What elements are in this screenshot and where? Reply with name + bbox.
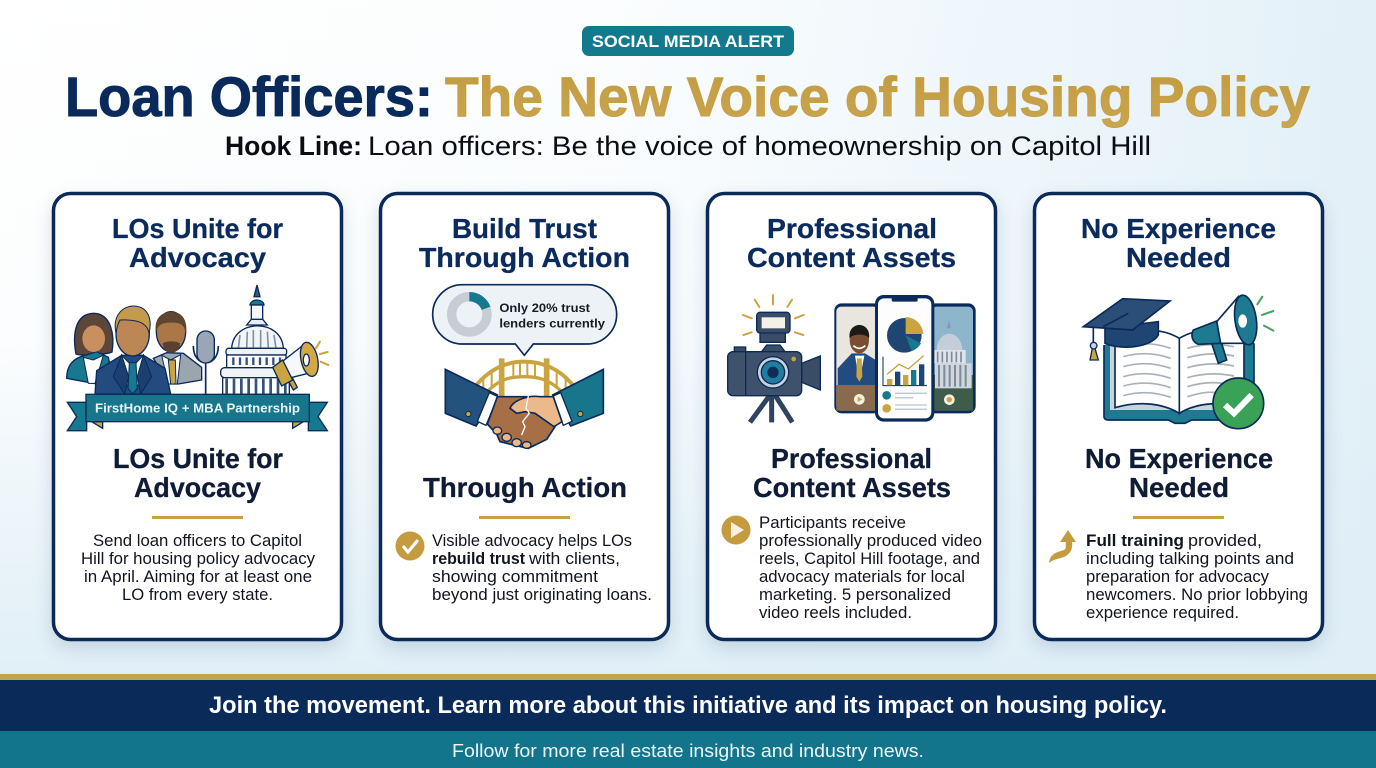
- card 3 body text: reels, Capitol Hill footage, and: [759, 549, 980, 568]
- icon: gold check: [396, 532, 424, 560]
- lens: [757, 357, 789, 388]
- megaphone: [1212, 340, 1227, 363]
- card 4 body text: provided,: [1188, 531, 1262, 550]
- bar and line chart: [883, 357, 927, 386]
- panel: professional content assets: [708, 194, 996, 640]
- hook line: Loan officers: Be the voice of homeownership on Capitol Hill: [368, 131, 1151, 161]
- card 1 subheading: [113, 443, 283, 503]
- card 2 body text: showing commitment: [432, 567, 598, 586]
- panel: no experience needed: [1034, 194, 1322, 640]
- ribbon: [67, 394, 327, 431]
- woman: [75, 313, 113, 355]
- card 4 body text: newcomers. No prior lobbying: [1086, 585, 1308, 604]
- card 2 body text: beyond just originating loans.: [432, 585, 652, 604]
- card 1 heading: Advocacy: [129, 242, 266, 273]
- right phone: [928, 303, 976, 413]
- bubble text: lenders currently: [499, 316, 605, 330]
- icon: loan officers, capitol and partnership ribbon: [67, 285, 328, 431]
- sleeves: [445, 369, 497, 426]
- card 4 subheading: Needed: [1129, 472, 1229, 503]
- camera rays: [743, 295, 804, 335]
- card 1 body text: LO from every state.: [122, 585, 273, 604]
- footer: gold stripe and call to action: [0, 674, 1376, 731]
- card 4 body text: preparation for advocacy: [1086, 567, 1269, 586]
- card 4 body text: [1086, 531, 1308, 622]
- speech bubble: [433, 285, 617, 355]
- icon: gold play: [722, 516, 750, 544]
- card 1 body text: Send loan officers to Capitol: [93, 531, 302, 550]
- megaphone: [273, 341, 328, 390]
- card 2 body text: Visible advocacy helps LOs: [432, 531, 632, 550]
- left phone: [834, 303, 881, 413]
- card 1 body text: [81, 531, 315, 604]
- card 3 subheading: Content Assets: [753, 472, 951, 503]
- badge: social media alert: [582, 26, 794, 56]
- card 1 body text: Hill for housing policy advocacy: [81, 549, 315, 568]
- card 3 subheading: Professional: [771, 443, 932, 474]
- title: The New Voice of Housing Policy: [445, 65, 1310, 128]
- donut 20 percent: [452, 297, 487, 332]
- title: Loan Officers:: [65, 65, 433, 128]
- hook line: Hook Line:: [225, 131, 362, 161]
- icon: gold up arrow: [1049, 530, 1076, 563]
- card 1 heading: LOs Unite for: [112, 213, 283, 244]
- bubble text: [499, 301, 605, 330]
- list rows: [882, 391, 891, 400]
- center phone: [875, 295, 934, 422]
- card 2 body text: rebuild trust: [432, 549, 525, 568]
- card 4 body text: Full training: [1086, 531, 1184, 550]
- bubble text: Only 20% trust: [499, 301, 590, 315]
- tripod: [750, 395, 792, 422]
- card 4 body text: including talking points and: [1086, 549, 1294, 568]
- card 2 gold rule: [479, 516, 570, 519]
- panel: LOs unite for advocacy: [54, 194, 342, 640]
- card 4 body text: experience required.: [1086, 603, 1239, 622]
- icon: trust speech bubble and handshake: [433, 285, 617, 448]
- card 3 body text: marketing. 5 personalized: [759, 585, 951, 604]
- badge: social media alert: SOCIAL MEDIA ALERT: [592, 32, 785, 51]
- flash: [760, 332, 785, 342]
- card 1 heading: [112, 213, 283, 273]
- panel: build trust through action: [380, 194, 668, 640]
- right man: [153, 353, 202, 384]
- footer: follow line: Follow for more real estate insights and industry news.: [452, 741, 924, 761]
- card 2 heading: [419, 213, 630, 273]
- footer: follow line: [0, 731, 1376, 768]
- green check: [1213, 378, 1264, 429]
- pie chart: [887, 318, 922, 353]
- camera body: [802, 356, 820, 390]
- icon: camera and phones: [728, 295, 976, 422]
- card 2 body text: [432, 531, 652, 604]
- card 3 subheading: [753, 443, 951, 503]
- card 4 subheading: [1085, 443, 1273, 503]
- center man: [95, 355, 171, 394]
- card 2 subheading: Through Action: [423, 472, 627, 503]
- card 3 heading: Content Assets: [747, 242, 956, 273]
- card 2 heading: Through Action: [419, 242, 630, 273]
- card 3 body text: [759, 513, 982, 622]
- graduation cap: [1105, 322, 1158, 347]
- card 3 body text: advocacy materials for local: [759, 567, 965, 586]
- card 1 gold rule: [152, 516, 243, 519]
- icon: loan officers, capitol and partnership ribbon: FirstHome IQ + MBA Partnership: [95, 401, 300, 416]
- card 3 body text: video reels included.: [759, 603, 912, 622]
- microphone: [193, 331, 218, 394]
- title: [65, 65, 1310, 128]
- hands: [487, 397, 555, 448]
- footer: gold stripe and call to action: Join the movement. Learn more about this initiative and its impact on housing policy.: [209, 692, 1167, 719]
- card 3 heading: [747, 213, 956, 273]
- card 3 body text: professionally produced video: [759, 531, 982, 550]
- card 4 heading: [1081, 213, 1276, 273]
- icon: book, cap, megaphone, check: [1083, 294, 1273, 429]
- card 4 gold rule: [1133, 516, 1224, 519]
- card 4 subheading: No Experience: [1085, 443, 1273, 474]
- bridge: [475, 358, 574, 397]
- card 1 subheading: Advocacy: [134, 472, 261, 503]
- card 4 heading: No Experience: [1081, 213, 1276, 244]
- capitol: [221, 285, 291, 394]
- card 1 subheading: LOs Unite for: [113, 443, 283, 474]
- book pages: [1110, 342, 1242, 410]
- card 2 heading: Build Trust: [452, 213, 597, 244]
- card 2 body text: with clients,: [528, 549, 620, 568]
- page lines: [1123, 344, 1234, 397]
- card 1 body text: in April. Aiming for at least one: [84, 567, 312, 586]
- card 4 heading: Needed: [1126, 242, 1231, 273]
- card 3 body text: Participants receive: [759, 513, 906, 532]
- book cover: [1104, 343, 1254, 423]
- card 3 heading: Professional: [767, 213, 937, 244]
